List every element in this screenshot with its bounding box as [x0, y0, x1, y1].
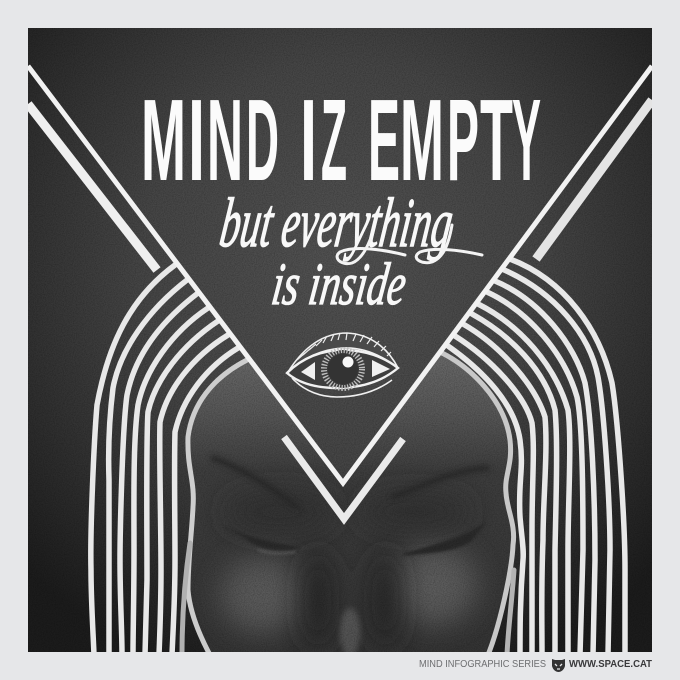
outer V chevron	[284, 437, 403, 519]
left eyebrow	[213, 458, 297, 507]
title: M	[141, 75, 186, 205]
eye highlight	[342, 356, 354, 368]
left eye socket shadow	[246, 499, 313, 524]
title: M	[400, 75, 444, 205]
right closed eye	[402, 523, 485, 555]
title: E	[368, 75, 400, 205]
subtitle swashes	[337, 225, 482, 264]
right thick diagonal	[536, 100, 652, 259]
footer	[419, 658, 653, 672]
left cheek	[220, 557, 304, 633]
title: I	[300, 75, 317, 205]
footer series label: MIND INFOGRAPHIC SERIES	[419, 659, 546, 670]
left closed eye	[231, 530, 296, 555]
left hair lines	[91, 265, 247, 655]
nose side shadows	[304, 550, 399, 650]
eye outline	[287, 350, 398, 388]
subtitle: is inside: is inside	[268, 251, 410, 318]
inner V line	[28, 66, 652, 483]
left sclera	[301, 362, 315, 380]
right eye socket shadow	[385, 501, 445, 526]
nose highlight	[340, 608, 360, 656]
icon: all-seeing eye	[287, 333, 398, 397]
title: T	[480, 75, 513, 205]
pupil	[328, 354, 358, 384]
iris	[324, 350, 362, 388]
lower eyelid line	[292, 378, 392, 397]
panel: chalkboard artwork: Y	[512, 75, 541, 205]
footer website: WWW.SPACE.CAT	[569, 658, 653, 670]
title: P	[447, 75, 479, 205]
title: N	[207, 75, 243, 205]
left thick diagonal	[28, 104, 157, 270]
right sclera	[372, 360, 390, 377]
subtitle: but everything: but everything	[216, 184, 458, 262]
eyelashes	[297, 333, 391, 360]
icon: cat logo	[552, 659, 565, 672]
upper eyelid	[288, 333, 398, 372]
right cheek	[393, 545, 477, 625]
title: Z	[321, 75, 347, 205]
right hair lines	[442, 259, 625, 655]
title	[144, 100, 540, 180]
title: I	[188, 75, 205, 205]
face	[180, 350, 520, 656]
title: D	[246, 75, 279, 205]
right eyebrow	[393, 468, 487, 497]
